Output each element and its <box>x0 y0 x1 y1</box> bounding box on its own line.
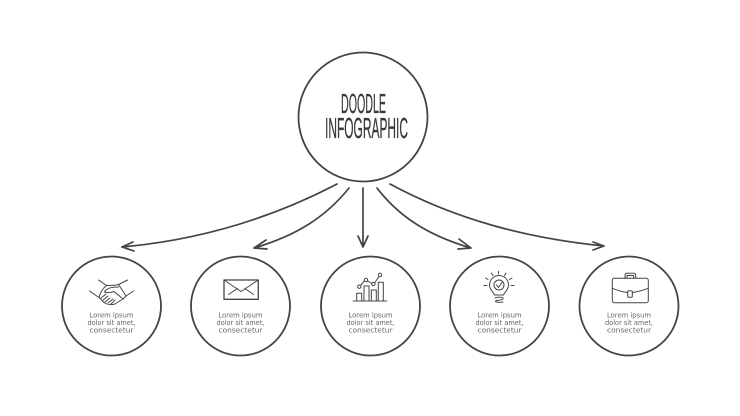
title: DOODLE <box>341 88 386 119</box>
text block: consectetur <box>218 326 263 334</box>
text block <box>346 312 394 334</box>
arrow 2 <box>254 188 349 249</box>
panel: briefcase <box>580 256 678 356</box>
arrow 4 <box>377 188 471 249</box>
text block: Lorem ipsum <box>348 312 392 320</box>
text block: Lorem ipsum <box>218 312 262 320</box>
title <box>325 88 408 145</box>
arrow 3 <box>358 188 368 247</box>
text block: dolor sit amet, <box>476 319 524 327</box>
text block: consectetur <box>90 326 134 334</box>
text block: consectetur <box>348 326 393 334</box>
panel: chart <box>321 256 420 356</box>
text block <box>216 312 264 334</box>
text block <box>605 312 653 334</box>
text block: consectetur <box>478 326 522 334</box>
text block: dolor sit amet, <box>605 319 653 327</box>
text block: Lorem ipsum <box>90 312 134 320</box>
text block: dolor sit amet, <box>346 319 394 327</box>
text block: dolor sit amet, <box>216 319 264 327</box>
panel: handshake <box>62 256 161 356</box>
main circle with title: INFOGRAPHIC <box>325 113 408 145</box>
icon: bar chart <box>353 273 387 301</box>
icon: briefcase <box>612 273 648 303</box>
text block <box>88 312 136 334</box>
text block: consectetur <box>607 326 651 334</box>
icon: handshake <box>90 280 134 305</box>
arrow 5 <box>390 184 604 250</box>
panel: envelope <box>191 256 290 356</box>
text block: Lorem ipsum <box>607 312 651 320</box>
main circle with title <box>298 52 428 182</box>
text block: Lorem ipsum <box>478 312 522 320</box>
icon: light bulb <box>484 272 514 302</box>
icon: envelope <box>224 280 258 299</box>
text block: dolor sit amet, <box>88 319 136 327</box>
arrow 1 <box>122 184 337 251</box>
panel: light bulb <box>450 256 549 356</box>
text block <box>476 312 524 334</box>
